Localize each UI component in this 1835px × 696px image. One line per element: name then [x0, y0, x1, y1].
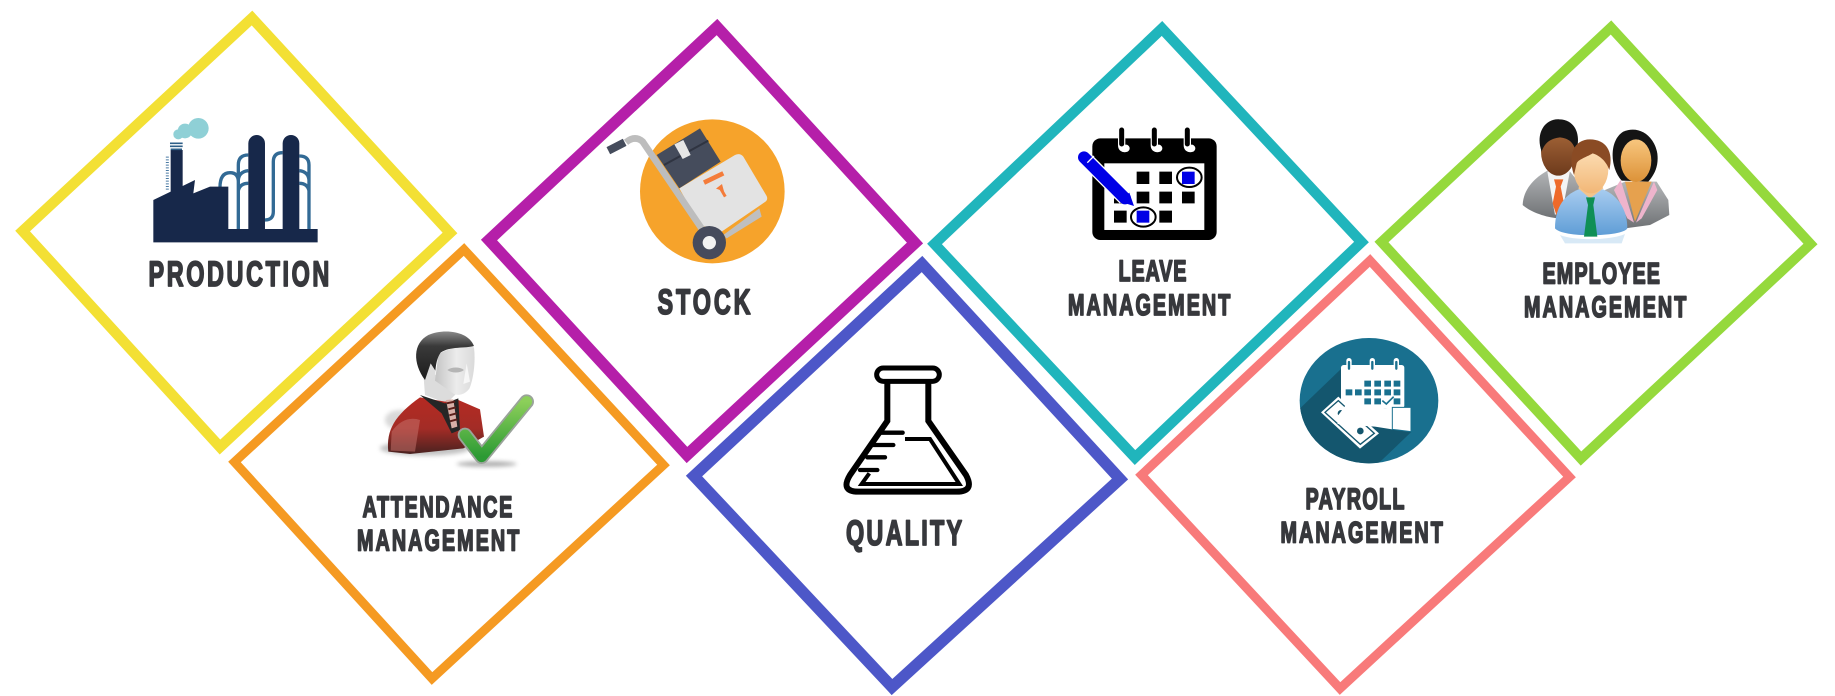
label: quality: QUALITY	[846, 514, 962, 553]
icon: person with check mark	[380, 331, 527, 467]
panel: payroll management	[1142, 260, 1570, 688]
label: stock: STOCK	[658, 283, 751, 322]
panel: attendance management	[234, 250, 664, 678]
label line: attendance: ATTENDANCE	[362, 491, 512, 524]
label: production: PRODUCTION	[148, 255, 329, 294]
diamond border: orange	[234, 250, 664, 678]
icon: hand truck with boxes	[608, 119, 785, 263]
panel: production	[23, 18, 450, 447]
panel: quality	[694, 264, 1120, 687]
label line: management: MANAGEMENT	[1068, 289, 1231, 322]
label: payroll management	[1280, 483, 1443, 550]
label: employee management	[1524, 258, 1687, 324]
diamond border: purple	[489, 27, 915, 455]
icon: three employees	[1523, 119, 1669, 243]
label line: management: MANAGEMENT	[1524, 291, 1687, 324]
icon: factory	[153, 118, 318, 242]
diamond border: blue	[694, 264, 1120, 687]
label line: leave: LEAVE	[1118, 255, 1186, 288]
label line: employee: EMPLOYEE	[1542, 258, 1660, 291]
panel: leave management	[934, 28, 1362, 458]
panel: stock	[489, 27, 915, 455]
diamond border: coral	[1142, 260, 1570, 688]
diamond border: teal	[934, 28, 1362, 458]
panel: employee management	[1382, 28, 1810, 458]
label line: payroll: PAYROLL	[1306, 483, 1405, 516]
label line: management: MANAGEMENT	[357, 525, 520, 558]
icon: laboratory flask	[846, 368, 969, 492]
label: leave management	[1068, 255, 1231, 322]
icon: calendar with pen	[1084, 130, 1217, 240]
diamond border: green	[1382, 28, 1810, 458]
diamond border: yellow	[23, 18, 450, 447]
label line: management: MANAGEMENT	[1280, 517, 1443, 550]
label: attendance management	[357, 491, 520, 558]
icon: payroll calendar and money	[1298, 338, 1438, 467]
